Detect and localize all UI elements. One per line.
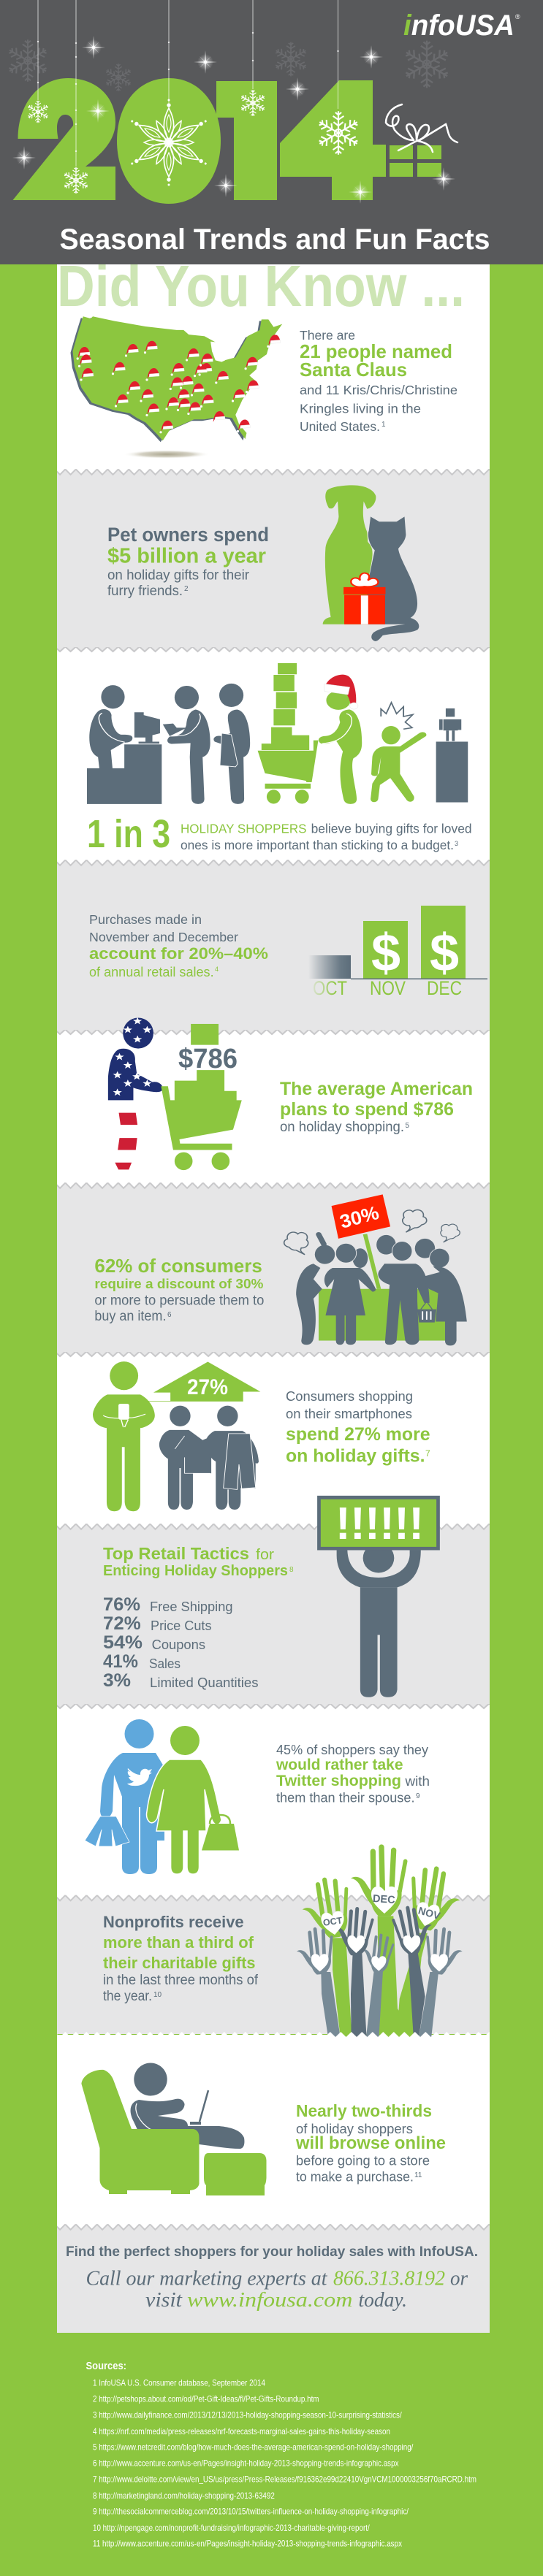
text: nonprofit fact: their charitable gifts (103, 1954, 256, 1972)
text: twitter fact: with (404, 1773, 430, 1789)
text: smartphone fact: 7 (425, 1448, 430, 1459)
text: pet spending: Pet owners spend (107, 524, 269, 546)
text: smartphone fact: on holiday gifts. (286, 1446, 425, 1467)
sources list: 1 InfoUSA U.S. Consumer database, September 2014 (93, 2378, 265, 2388)
sparkles (12, 36, 455, 204)
panel: nonprofits (57, 1895, 490, 2034)
panel: header (0, 0, 543, 264)
text: discount fact: buy an item. (94, 1309, 166, 1324)
text: retail share: November and December (89, 930, 238, 944)
text: twitter fact: Twitter shopping (276, 1773, 401, 1789)
icon: flag-patterned shopper (108, 1017, 163, 1169)
list: tactic percentages (103, 1594, 259, 1691)
panel: call to action (57, 2224, 490, 2333)
price label: $786 (178, 1044, 238, 1074)
cart with boxes (258, 663, 319, 803)
list: tactic percentages: 41% (103, 1651, 138, 1672)
text: nonprofit fact: in the last three months of (103, 1973, 259, 1988)
text: 1 in 3: believe buying gifts for loved (311, 822, 472, 836)
text: santa claus fact: United States. (300, 419, 380, 434)
panel: twitter (57, 1704, 490, 1897)
heading: tactics (103, 1544, 294, 1579)
text: browse online: Nearly two-thirds (296, 2101, 432, 2120)
faint background snowflakes (7, 39, 450, 91)
panel: shoppers (57, 647, 490, 862)
list: tactic percentages: Limited Quantities (150, 1675, 259, 1690)
list: tactic percentages: Coupons (152, 1637, 205, 1652)
icon: cart with boxes (161, 1024, 242, 1170)
heading: tactics: Top Retail Tactics (103, 1544, 249, 1563)
month labels on hearts (322, 1893, 442, 1928)
logo: infoUSA: ® (515, 13, 520, 20)
text: find shoppers: Find the perfect shoppers for your holiday sales with InfoUSA. (66, 2244, 478, 2260)
subtitle: Seasonal Trends and Fun Facts (60, 223, 490, 256)
illustration: checkout line (87, 663, 468, 804)
month labels on hearts: DEC (372, 1893, 396, 1906)
illustration: raised hands (57, 1847, 490, 2039)
text: browse online: to make a purchase. (296, 2169, 414, 2185)
text: pet spending: furry friends. (107, 584, 183, 599)
list: tactic percentages: 54% (103, 1632, 143, 1653)
santa shopper (319, 675, 362, 804)
panel: smartphones (57, 1352, 490, 1525)
month labels on hearts: OCT (322, 1915, 343, 1928)
icon: person holding sign (317, 1496, 440, 1697)
customers (163, 684, 250, 804)
panel: average spend (57, 1030, 490, 1183)
text: pet spending: 2 (184, 585, 189, 593)
hanging snowflakes (27, 90, 360, 194)
text: retail share: 4 (215, 966, 219, 973)
text: average spend: plans to spend $786 (280, 1099, 454, 1120)
illustration: smartphone shopper (93, 1361, 260, 1511)
sources list: 5 https://www.netcredit.com/blog/how-much-does-the-average-american-spend-on-holiday-shopping/ (93, 2442, 414, 2453)
text: browse online (295, 2101, 446, 2185)
list: tactic percentages: Price Cuts (151, 1618, 212, 1633)
text: nonprofit fact: the year. (103, 1989, 152, 2004)
cashier and counter (87, 685, 162, 804)
chart: monthly bars: OCT (313, 977, 347, 999)
text: average spend: The average American (280, 1079, 473, 1099)
title number 2014 (13, 78, 441, 204)
text: retail share (89, 912, 268, 979)
text: browse online: of holiday shoppers (296, 2121, 413, 2136)
text: 1 in 3: ones is more important than sticking to a budget. (181, 838, 454, 852)
text: visit line: visit (145, 2288, 183, 2312)
heading: did you know: Did You Know ... (57, 253, 465, 318)
map: united states (71, 316, 282, 459)
text: santa claus fact: Santa Claus (300, 359, 407, 381)
child reaching for toy (371, 703, 426, 802)
panel: purchases by month (57, 860, 490, 1032)
text: visit line: today. (358, 2288, 407, 2312)
logo: infoUSA: infoUSA (403, 9, 514, 42)
text: browse online: before going to a store (296, 2153, 430, 2168)
list: tactic percentages: 76% (103, 1594, 140, 1615)
list: tactic percentages: Sales (149, 1656, 181, 1671)
text: discount fact: 6 (167, 1311, 172, 1319)
sources list: 6 http://www.accenture.com/us-en/Pages/insight-holiday-2013-shopping-trends-infographic.aspx (93, 2458, 399, 2469)
sources list: 2 http://petshops.about.com/od/Pet-Gift-Ideas/fl/Pet-Gifts-Roundup.htm (93, 2393, 319, 2404)
text: smartphone fact: spend 27% more (286, 1424, 430, 1445)
text: discount fact: require a discount of 30% (94, 1276, 263, 1291)
icon: blue twitter shopper (85, 1719, 164, 1874)
text: santa claus fact: Kringles living in the (300, 402, 421, 416)
large ornament snowflake (129, 99, 209, 186)
text: 1 in 3: HOLIDAY SHOPPERS (181, 822, 307, 836)
panel: santa map (57, 253, 490, 472)
dark hands (333, 1904, 436, 2039)
text: smartphone fact: on their smartphones (286, 1406, 412, 1421)
gift ribbon (386, 104, 457, 152)
text: retail share: of annual retail sales. (89, 965, 214, 979)
text: average spend: on holiday shopping. (280, 1120, 404, 1135)
heading: tactics: for (256, 1547, 274, 1563)
text: call line: Call our marketing experts at (86, 2266, 327, 2290)
toy robot on pedestal (436, 708, 468, 803)
list: tactic percentages: 72% (103, 1613, 141, 1634)
text: retail share: Purchases made in (89, 912, 202, 927)
arrow label: 27% (187, 1375, 228, 1399)
icon: person holding sign: !!!!!! (335, 1499, 424, 1549)
text: nonprofit fact: Nonprofits receive (103, 1913, 244, 1931)
icon: person on armchair with laptop (81, 2063, 267, 2195)
sources list: 4 https://nrf.com/media/press-releases/nrf-forecasts-marginal-sales-gains-this-holiday-season (93, 2426, 390, 2437)
panel: average american figure and cart (108, 1017, 473, 1170)
sources list: Sources: (86, 2360, 126, 2372)
list: tactic percentages: 3% (103, 1670, 131, 1691)
text: call line (86, 2266, 468, 2290)
text: santa claus fact: and 11 Kris/Chris/Christine (300, 383, 457, 397)
text: browse online: will browse online (295, 2133, 446, 2153)
heading: tactics: Enticing Holiday Shoppers (103, 1563, 288, 1579)
text: 1 in 3: 1 in 3 (87, 812, 170, 856)
text: call line: or (450, 2266, 468, 2290)
panel: online browsing (57, 2035, 490, 2227)
chart: monthly bars: $ (430, 924, 459, 982)
chart: monthly bars: NOV (370, 977, 406, 999)
text: call line: 866.313.8192 (333, 2266, 445, 2290)
text: twitter fact: them than their spouse. (276, 1789, 415, 1805)
text: santa claus fact: 1 (381, 421, 386, 429)
text: discount fact: or more to persuade them to (94, 1293, 264, 1309)
list: tactic percentages: Free Shipping (150, 1599, 232, 1614)
sources list: 8 http://marketingland.com/holiday-shopping-2013-63492 (93, 2491, 275, 2501)
text: nonprofit fact: 10 (153, 1991, 162, 1999)
month labels on hearts: NOV (417, 1904, 442, 1922)
icon: dog, cat and gift (323, 485, 419, 641)
hanging strings (37, 0, 339, 167)
text: pet spending (107, 524, 269, 599)
text: pet spending: on holiday gifts for their (107, 568, 250, 583)
text: smartphone fact (286, 1388, 430, 1467)
sources list: 11 http://www.accenture.com/us-en/Pages/insight-holiday-2013-shopping-trends-infographic.aspx (93, 2539, 402, 2549)
sources list: 9 http://thesocialcommerceblog.com/2013/10/15/twitters-influence-on-holiday-shopping-infographic/ (93, 2507, 409, 2517)
panel: discount (57, 1182, 490, 1353)
text: twitter fact: 45% of shoppers say they (276, 1742, 429, 1757)
text: nonprofit fact: more than a third of (103, 1933, 254, 1952)
text: average spend: 5 (405, 1122, 409, 1130)
text: twitter fact: 9 (416, 1792, 420, 1800)
text: 1 in 3 (87, 812, 472, 856)
text: nonprofit fact (103, 1913, 259, 2004)
text: discount fact: 62% of consumers (94, 1255, 262, 1277)
panel: pet owners (57, 469, 490, 649)
sign label: 30% (338, 1201, 381, 1233)
text: visit line (145, 2288, 407, 2312)
sources list: 10 http://npengage.com/nonprofit-fundraising/infographic-2013-charitable-giving-report/ (93, 2523, 370, 2533)
panel: retail tactics (57, 1496, 490, 1705)
text: santa claus fact: There are (300, 328, 355, 343)
text: twitter fact: would rather take (276, 1757, 403, 1773)
text: visit line: www.infousa.com (187, 2288, 352, 2312)
text: santa claus fact: 21 people named (300, 340, 452, 362)
text: pet spending: $5 billion a year (107, 545, 266, 568)
text: average spend (280, 1079, 473, 1135)
illustration: crowd at sale (284, 1194, 467, 1345)
text: retail share: account for 20%–40% (89, 944, 268, 963)
text: smartphone fact: Consumers shopping (286, 1388, 413, 1404)
hearts (371, 1887, 398, 1914)
text: browse online: 11 (414, 2171, 422, 2179)
text: twitter fact (276, 1742, 430, 1805)
gray hands (295, 1927, 464, 2039)
text: 1 in 3: 3 (455, 840, 458, 847)
heading: tactics: 8 (289, 1566, 294, 1574)
icon: green shopper with handbag (146, 1726, 239, 1874)
chart: monthly bars: $ (371, 924, 400, 982)
text: santa claus fact (300, 328, 457, 434)
sources list: 3 http://www.dailyfinance.com/2013/12/13/2013-holiday-shopping-season-10-surprising-statistics/ (93, 2410, 402, 2420)
chart: monthly bars (308, 906, 487, 999)
chart: monthly bars: DEC (427, 977, 462, 999)
text: discount fact (94, 1255, 264, 1324)
green hands (299, 1847, 464, 2039)
sources list (86, 2360, 476, 2549)
